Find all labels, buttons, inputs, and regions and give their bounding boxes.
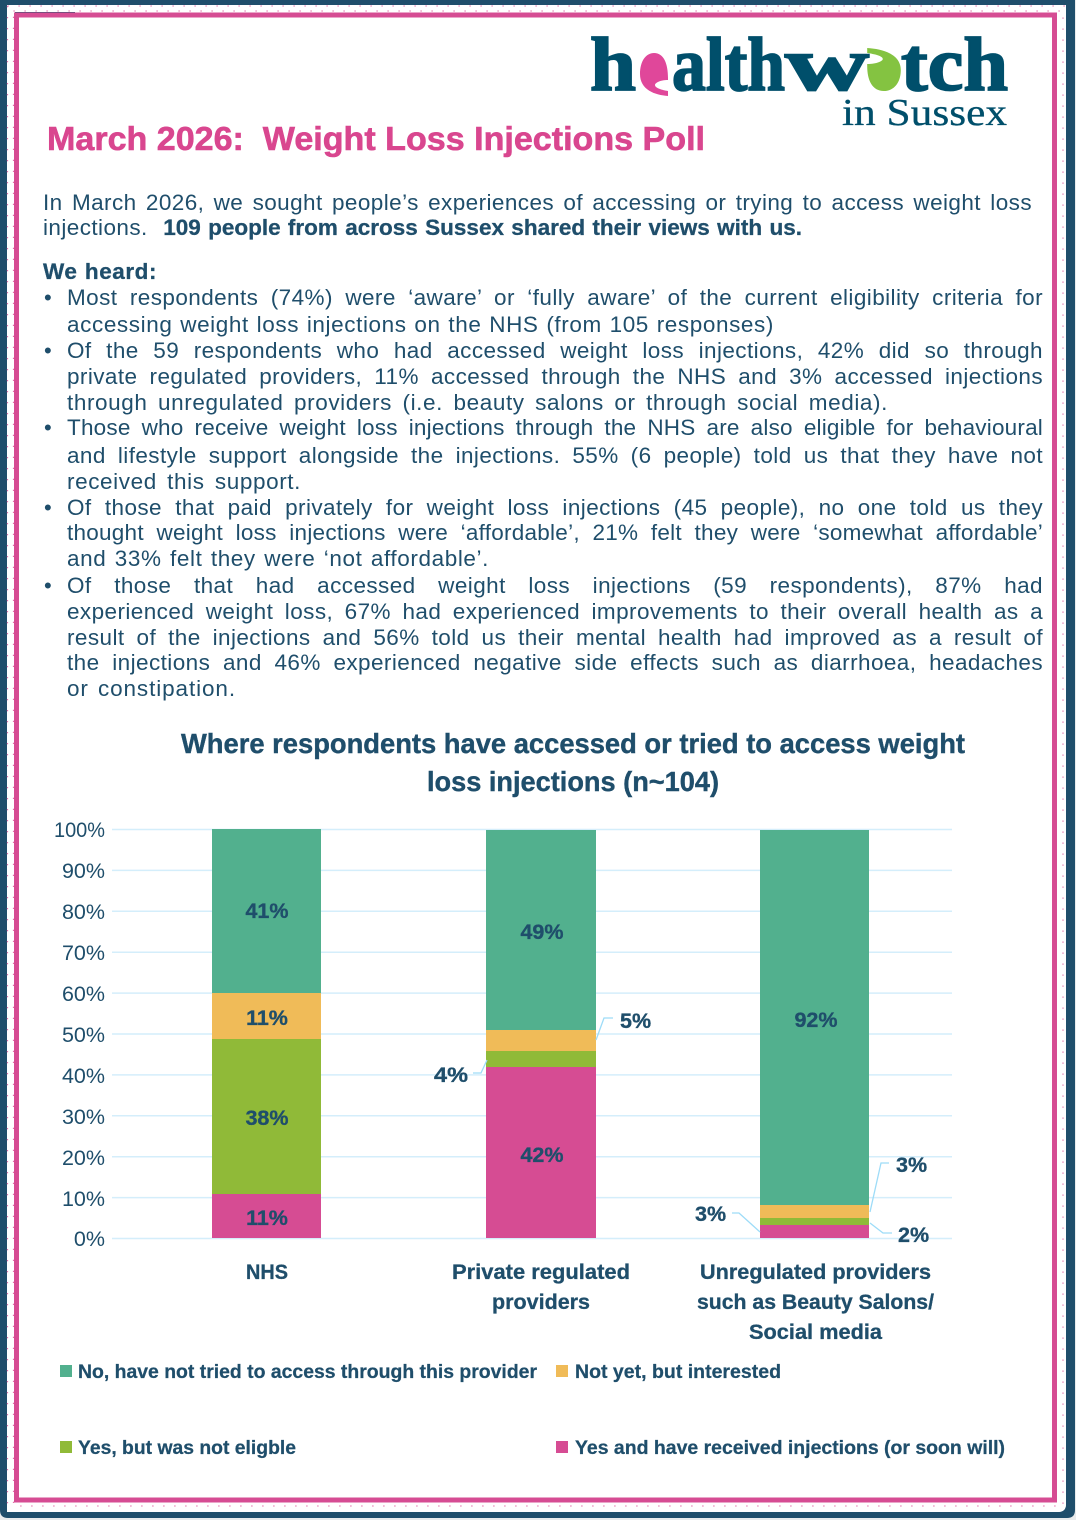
bar: private regulated providers: 5% (620, 1009, 651, 1033)
bar: NHS: 38% (245, 1106, 289, 1130)
text: • (44, 415, 52, 440)
bullet: affordability (44, 495, 1043, 571)
text: and lifestyle support alongside the injections. 55% (6 people) told us that they have not (67, 443, 1043, 468)
text: experienced weight loss, 67% had experienced improvements to their overall health as a (67, 599, 1043, 624)
text: accessing weight loss injections on the NHS (from 105 responses) (67, 312, 774, 337)
logo: healthwatch in Sussex: tch (901, 23, 1008, 107)
text: • (44, 338, 52, 363)
legend: Not yet, but interested (575, 1362, 781, 1383)
gridlines and y axis: 0% (74, 1227, 105, 1251)
legend: Yes, but was not eligble (78, 1438, 296, 1459)
logo: healthwatch in Sussex: in Sussex (842, 92, 1007, 134)
text: Of those that paid privately for weight loss injections (45 people), no one told us they (67, 495, 1043, 520)
x axis labels: such as Beauty Salons/ (697, 1291, 934, 1314)
text: injections. 109 people from across Sussex shared their views with us. (43, 215, 802, 240)
bar: NHS: 11% (246, 1206, 288, 1230)
legend (60, 1362, 1005, 1459)
x axis labels: providers (492, 1291, 590, 1314)
bar: unregulated providers: 3% (695, 1202, 726, 1226)
text: the injections and 46% experienced negative side effects such as diarrhoea, headaches (67, 650, 1043, 675)
bullet: awareness of eligibility (44, 285, 1043, 337)
bar: unregulated providers: 2% (898, 1223, 929, 1247)
logo: healthwatch in Sussex: w (785, 23, 869, 107)
intro text (43, 190, 1032, 240)
x axis labels: NHS (246, 1261, 288, 1284)
gridlines and y axis: 40% (62, 1064, 105, 1088)
bar: private regulated providers: 42% (520, 1143, 564, 1167)
logo: healthwatch in Sussex (590, 23, 1008, 134)
gridlines and y axis: 80% (62, 900, 105, 924)
gridlines and y axis: 60% (62, 982, 105, 1006)
we heard heading: We heard: (43, 259, 157, 284)
x axis labels (246, 1261, 934, 1344)
gridlines and y axis: 50% (62, 1023, 105, 1047)
gridlines and y axis: 70% (62, 941, 105, 965)
text: • (44, 573, 52, 598)
text: Of those that had accessed weight loss injections (59 respondents), 87% had (67, 573, 1043, 598)
logo: healthwatch in Sussex: h (590, 23, 636, 107)
chart title: loss injections (n~104) (427, 766, 719, 797)
chart title: Where respondents have accessed or tried to access weight (181, 728, 965, 759)
text: Of the 59 respondents who had accessed weight loss injections, 42% did so through (67, 338, 1043, 363)
text: and 33% felt they were ‘not affordable’. (67, 546, 489, 571)
bar: private regulated providers (434, 830, 651, 1238)
gridlines and y axis (54, 818, 952, 1251)
x axis labels: Unregulated providers (700, 1261, 931, 1284)
bar: NHS (212, 829, 321, 1238)
logo: healthwatch in Sussex: alth (672, 23, 785, 107)
title: March 2026: Weight Loss Injections Poll (47, 120, 705, 157)
gridlines and y axis: 20% (62, 1146, 105, 1170)
chart title (181, 728, 965, 797)
bar: unregulated providers: 3% (896, 1153, 927, 1177)
bar: NHS: 41% (245, 899, 289, 923)
text: thought weight loss injections were ‘affordable’, 21% felt they were ‘somewhat affordable’ (67, 520, 1043, 545)
gridlines and y axis: 90% (62, 859, 105, 883)
text: • (44, 285, 52, 310)
x axis labels: Social media (749, 1321, 882, 1344)
bullet: outcomes (44, 573, 1043, 701)
text: • (44, 495, 52, 520)
text: Those who receive weight loss injections through the NHS are also eligible for behavioural (67, 415, 1043, 440)
bar: private regulated providers: 49% (520, 920, 564, 944)
text: through unregulated providers (i.e. beauty salons or through social media). (67, 390, 888, 415)
bar: unregulated providers (695, 830, 929, 1247)
text: result of the injections and 56% told us their mental health had improved as a result of (67, 625, 1043, 650)
legend: Yes and have received injections (or soon will) (575, 1438, 1005, 1459)
bullet: where accessed (44, 338, 1043, 415)
legend: No, have not tried to access through this provider (78, 1362, 538, 1383)
gridlines and y axis: 10% (62, 1187, 105, 1211)
logo: healthwatch in Sussex: e (646, 49, 661, 86)
gridlines and y axis: 100% (54, 818, 105, 842)
text: In March 2026, we sought people’s experiences of accessing or trying to access weight loss (43, 190, 1032, 215)
stacked bar chart (54, 818, 952, 1344)
bar: unregulated providers: 92% (794, 1008, 838, 1032)
bullet: behavioural support (44, 415, 1043, 494)
bar: private regulated providers: 4% (434, 1063, 468, 1087)
bar: NHS: 11% (246, 1006, 288, 1030)
gridlines and y axis: 30% (62, 1105, 105, 1129)
text: received this support. (67, 469, 301, 494)
text: Most respondents (74%) were ‘aware’ or ‘fully aware’ of the current eligibility criteria for (67, 285, 1043, 310)
text: or constipation. (67, 676, 236, 701)
x axis labels: Private regulated (452, 1261, 630, 1284)
text: private regulated providers, 11% accessed through the NHS and 3% accessed injections (67, 364, 1043, 389)
logo: healthwatch in Sussex: a (877, 51, 894, 88)
